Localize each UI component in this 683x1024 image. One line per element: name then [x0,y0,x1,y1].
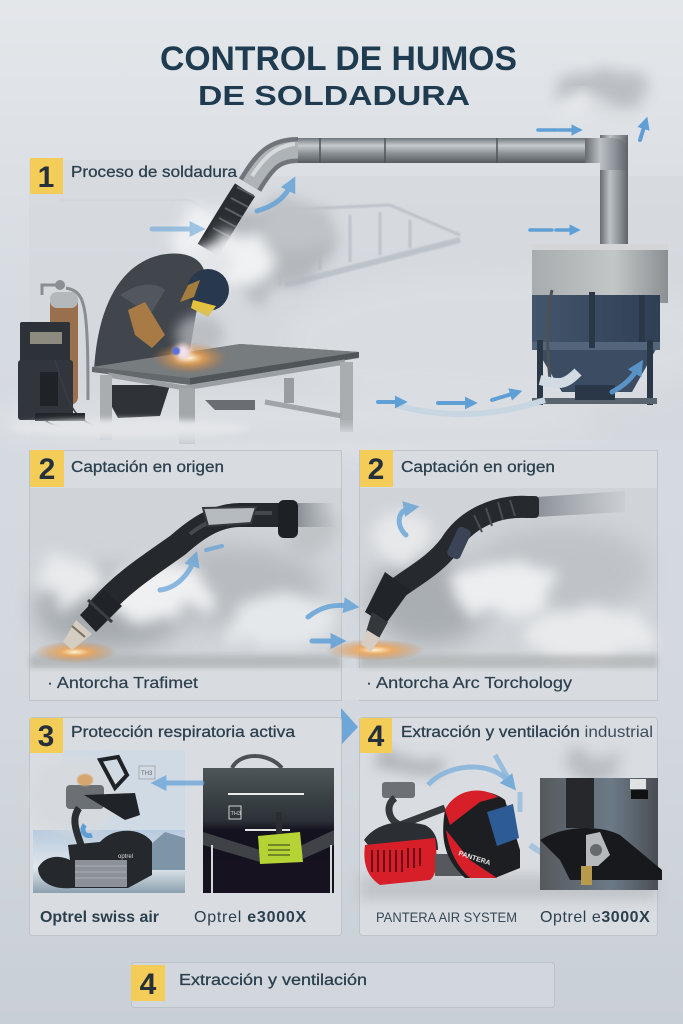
heading: Extracción y ventilación industrial [401,724,653,741]
welding table [92,344,359,444]
image area [30,488,341,668]
duct [208,135,628,250]
welder [94,253,255,418]
smoke around welder [170,200,340,300]
panel frame [30,450,342,700]
sparks [325,639,425,661]
captions: Optrel swiss air [40,909,159,926]
caption: · Antorcha Trafimet [47,675,199,692]
background factory hall [60,200,460,285]
image area [360,488,657,668]
weld sparks [152,342,228,374]
heading: Captación en origen [401,459,555,476]
bottom bar: extraccion y ventilacion [131,962,554,1008]
captions: Optrel e3000X [540,909,650,926]
captions: PANTERA AIR SYSTEM [376,909,517,925]
badge 2: 2 [368,453,384,486]
product photo: Optrel swiss air: TH3 [141,771,153,777]
heading: Captación en origen [71,459,224,476]
arrow between panels 3 and 4 [341,708,358,745]
panel 3: proteccion respiratoria activa [30,718,342,936]
title: CONTROL DE HUMOS [160,40,517,78]
smoke [30,508,341,668]
product photo: Optrel e3000X [203,756,334,893]
panel frame [360,718,658,936]
smoke [360,514,657,668]
floor ducts and soft mist [0,372,600,448]
badge 2 [30,450,64,487]
badge 4 [360,718,392,753]
airflow arrow [160,780,202,786]
product photo: Pantera air system: PANTERA [457,850,491,867]
label: Extracción y ventilación [179,972,367,989]
caption: · Antorcha Arc Torchology [366,675,572,692]
smoke over hose end [197,232,276,292]
dust collector [532,244,668,405]
badge 1 [30,158,63,194]
badge 3 [30,718,63,753]
smoke plume over stack [556,72,651,129]
badge 4: 4 [140,968,157,1001]
airflow arrows [152,124,645,403]
panel 2 right: antorcha Arc Torchology [308,450,658,700]
badge 3: 3 [38,720,54,753]
sparks [33,641,117,663]
badge 4 [131,965,165,1001]
heading 1: Proceso de soldadura [71,164,237,181]
product photo: Pantera air system [364,782,520,885]
badge 1: 1 [38,161,54,194]
torch [361,491,625,652]
welding machine and gas cylinder [18,280,95,428]
panel 4: extraccion y ventilacion industrial [360,718,662,936]
product photo: Optrel swiss air [30,750,185,893]
airflow arrow [160,546,222,590]
captions [376,909,650,926]
title [160,40,517,111]
product photo: Optrel e3000X: TH3 [230,811,241,817]
bar frame [132,962,554,1008]
captions [40,909,307,926]
airflow arrows [308,508,410,641]
torch [63,500,335,650]
badge 2 [360,450,393,487]
panel 1: proceso de soldadura [0,72,683,448]
panel 1 backdrop [29,160,683,440]
panel frame [360,450,658,700]
panel frame [30,718,342,936]
airflow and smoke [381,754,615,855]
product photo: Optrel swiss air: optrel [118,854,133,860]
title: DE SOLDADURA [198,80,470,111]
heading: Protección respiratoria activa [71,724,295,741]
badge 2: 2 [39,453,55,486]
panel 2 left: antorcha Trafimet [30,450,342,700]
caption extension strip [342,668,360,700]
captions: Optrel e3000X [194,909,307,926]
product photo: Optrel e3000X unit [540,778,662,890]
floor haze [360,875,657,900]
badge 4: 4 [368,720,385,753]
